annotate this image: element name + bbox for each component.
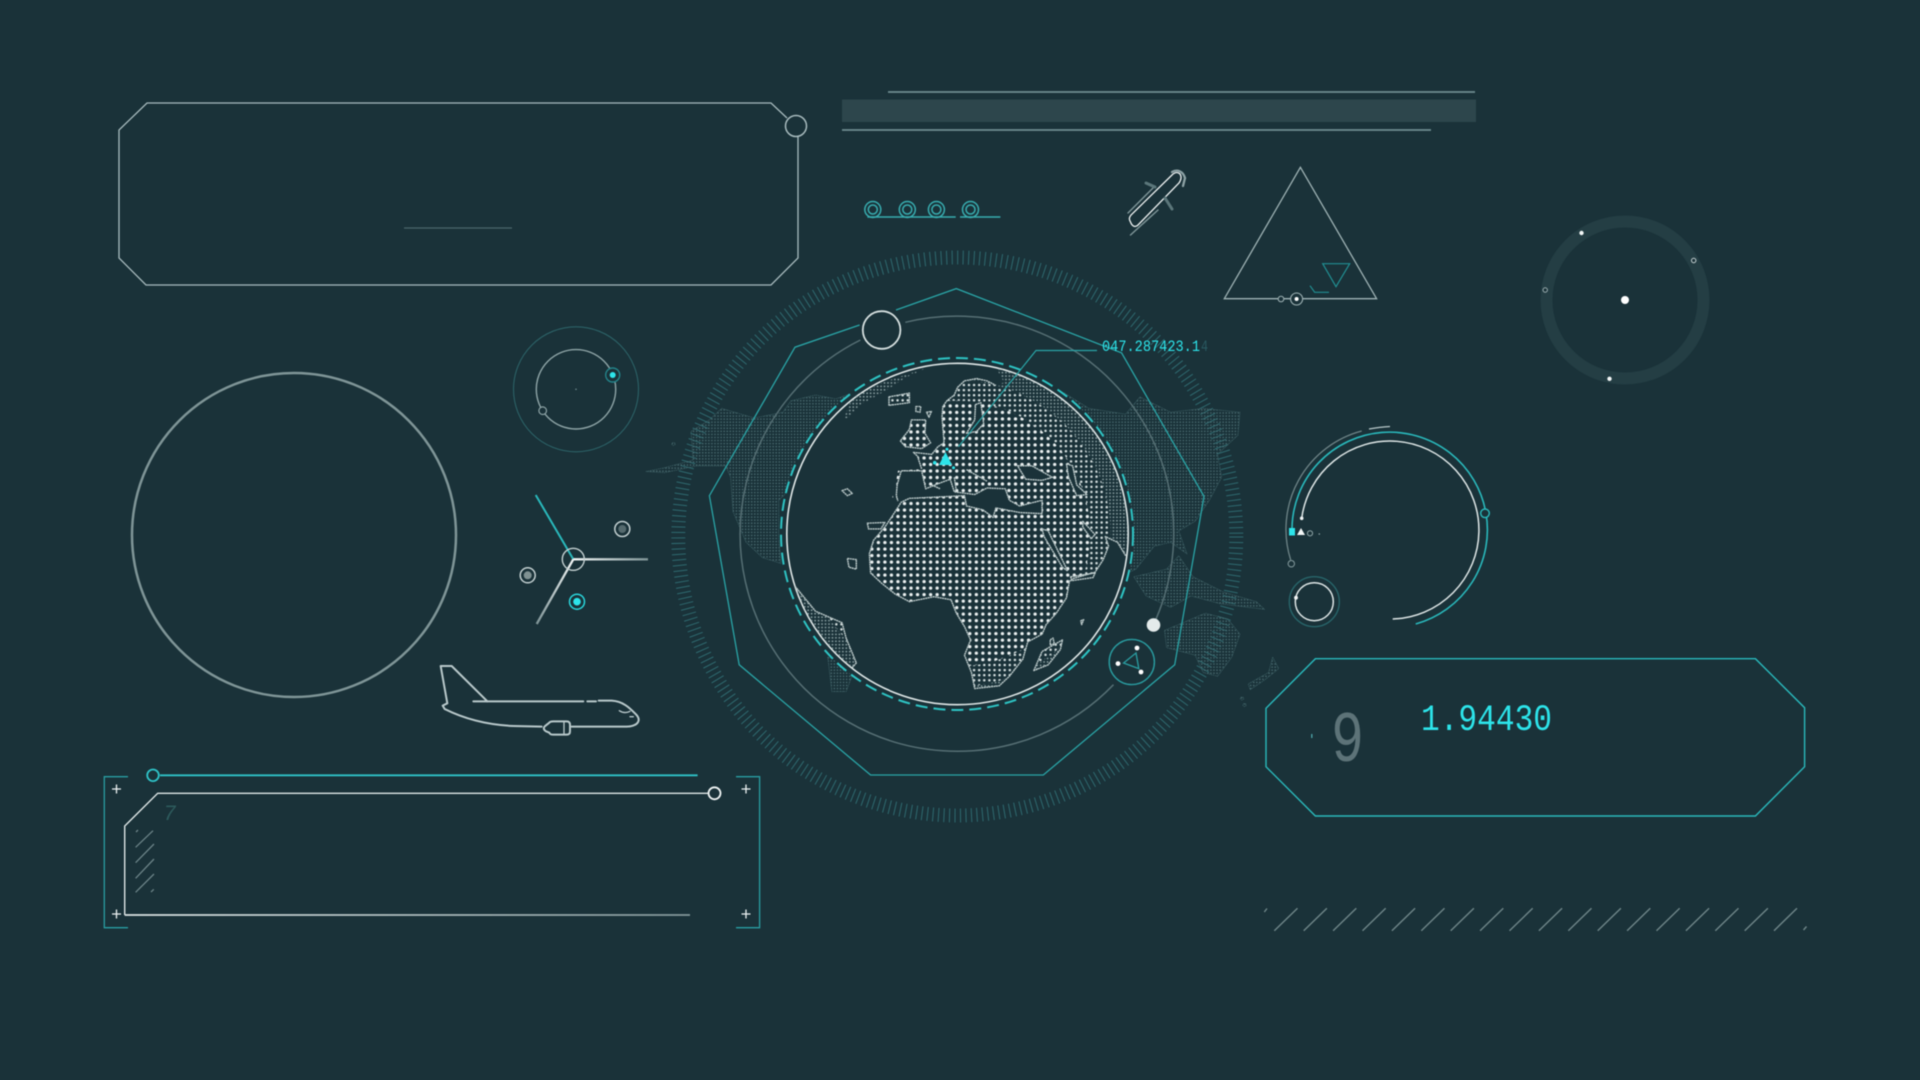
globe continents <box>795 368 1128 690</box>
panel: top left angular frame <box>119 103 806 285</box>
tick ring <box>678 258 1236 816</box>
icon: airplane <box>441 666 639 735</box>
HUD canvas <box>103 90 1808 932</box>
hatch strip <box>1264 908 1806 931</box>
gray orbit ring <box>740 316 1174 751</box>
globe outline <box>787 363 1128 705</box>
triangle node badge <box>1109 639 1154 685</box>
dim flat world map <box>646 393 1279 707</box>
icon: paperclip plane <box>1128 171 1185 235</box>
icon: three-arm node <box>520 495 648 624</box>
panel: right octagonal readout: 9 <box>1331 701 1364 783</box>
icon: top right dotted orbit ring <box>1543 222 1704 381</box>
coordinate readout: 047.287423.1 <box>1102 338 1200 356</box>
white orbit dot <box>1147 618 1160 632</box>
panel: bottom left bracket frame: 7 <box>163 802 177 827</box>
dashed cyan ring <box>781 358 1133 710</box>
small top ring node <box>863 311 900 349</box>
octagon frame <box>709 289 1204 775</box>
large empty circle <box>132 373 456 697</box>
coordinate readout: 4 <box>1201 338 1208 356</box>
icon: triangle with inset marker <box>1224 167 1377 305</box>
chart: right circular gauge <box>1286 426 1489 627</box>
panel: bottom left bracket frame <box>104 770 760 928</box>
icon: small radar <box>514 327 638 452</box>
location marker with leader line <box>933 350 1097 469</box>
chart: central globe radar <box>646 258 1279 816</box>
panel: right octagonal readout <box>1266 659 1805 816</box>
panel: right octagonal readout: 1.94430 <box>1421 700 1552 742</box>
icon: four teal rings <box>865 202 1000 218</box>
header bar with rules <box>842 92 1476 130</box>
